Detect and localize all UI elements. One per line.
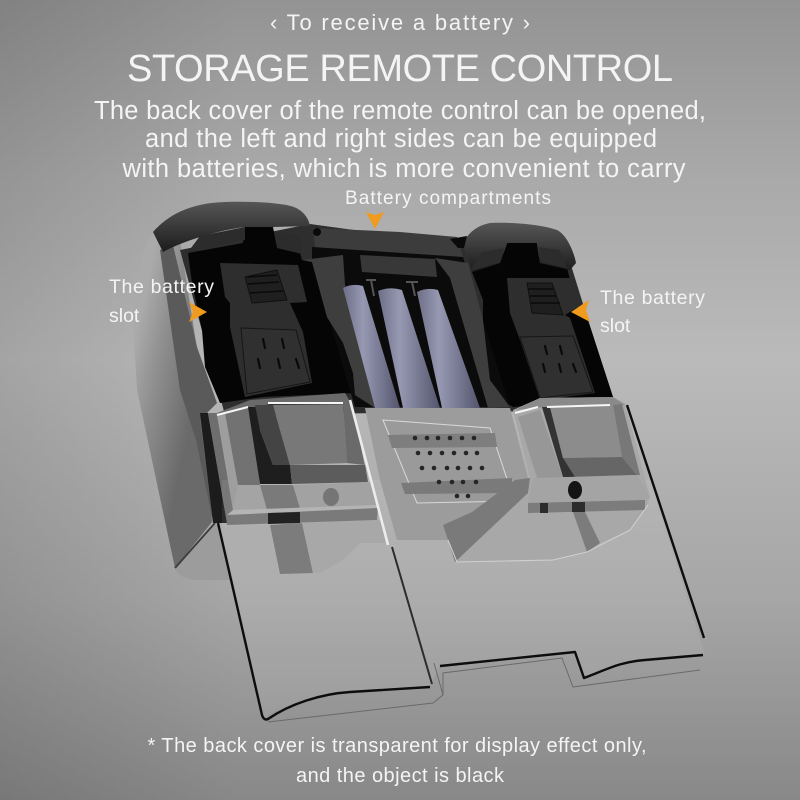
white highlights on cover top [217,403,610,415]
arrow: left slot [189,302,207,322]
right rib [435,258,510,408]
door right edge [343,403,368,482]
right mid light band [528,475,650,503]
transparent back cover [217,393,705,722]
label: battery compartments [345,188,551,229]
left slot recess [188,227,355,403]
description: with batteries, which is more convenient to carry [122,155,686,183]
wedge dark edge [175,523,215,568]
black slot shadow through cover [248,407,292,484]
inner ledge [360,255,437,277]
description: and the left and right sides can be equipped [145,125,657,153]
right door edge [613,404,640,475]
grey panel through cover [225,408,260,485]
right dark strip [542,407,575,477]
speaker bands [388,433,497,448]
label: left battery slot: slot [109,305,140,327]
label: left battery slot [109,276,214,327]
right section base [448,397,650,562]
main dark fill [180,224,625,415]
horizontal band left [227,508,378,525]
center battery bay [312,247,510,407]
label: right battery slot: slot [600,315,631,337]
right battery slot door [507,278,595,400]
label: left battery slot: The battery [109,276,214,298]
center panel [365,408,528,540]
cover top tint left [217,393,352,416]
side black strip through cover [200,413,227,523]
batteries [343,285,480,408]
description [94,97,706,183]
centre hinge white line [350,400,388,545]
right cover top tint [515,397,625,410]
battery contacts [366,280,418,296]
title: STORAGE REMOTE CONTROL [127,48,673,90]
arrow: right slot [571,300,590,322]
bottom thin reflection [268,658,700,722]
right strip [518,410,563,478]
cover outlines [218,405,704,720]
mounting holes [313,228,467,248]
label: right battery slot [571,287,705,337]
cover button right [568,481,582,499]
lip over band [227,505,378,515]
footnote [148,735,646,787]
cover glass base lower [222,480,705,718]
description: The back cover of the remote control can be opened, [94,97,706,125]
top label: ‹ To receive a battery › [270,10,530,35]
left battery slot door [220,263,312,397]
dark diagonal band [443,478,530,562]
left body side face [133,232,212,568]
right cap top [463,223,576,272]
body side strip [160,245,217,522]
speaker dots [413,436,484,498]
label: battery compartments: Battery compartments [345,188,551,209]
left cap tabs [188,227,302,254]
speaker panel [383,420,513,503]
footnote: and the object is black [296,765,505,787]
arrow: compartments [366,212,384,229]
door lower shade [290,465,368,484]
mid light band: left, stripe, right [233,485,267,510]
door through cover [273,405,347,465]
body lower wedge [175,523,232,580]
lower light sections [222,525,280,577]
side grey strip through cover [208,413,233,523]
right stripe below band [573,512,600,552]
right cap tabs [470,247,567,271]
horizontal band right [528,500,645,513]
left cover strip [217,413,238,510]
right door through cover [550,405,622,458]
remote control body [133,202,625,580]
left cap top [153,202,310,252]
left rib [302,255,375,408]
cover button left [323,488,339,506]
center top ledge [313,228,463,257]
right slot recess [472,243,613,407]
wedge thin light outline [448,505,648,562]
footnote: * The back cover is transparent for display effect only, [148,735,646,757]
label: right battery slot: The battery [600,287,705,309]
dark band through cover [255,405,290,465]
right door lower shade [563,457,637,477]
centre hinge dark line [392,547,432,684]
